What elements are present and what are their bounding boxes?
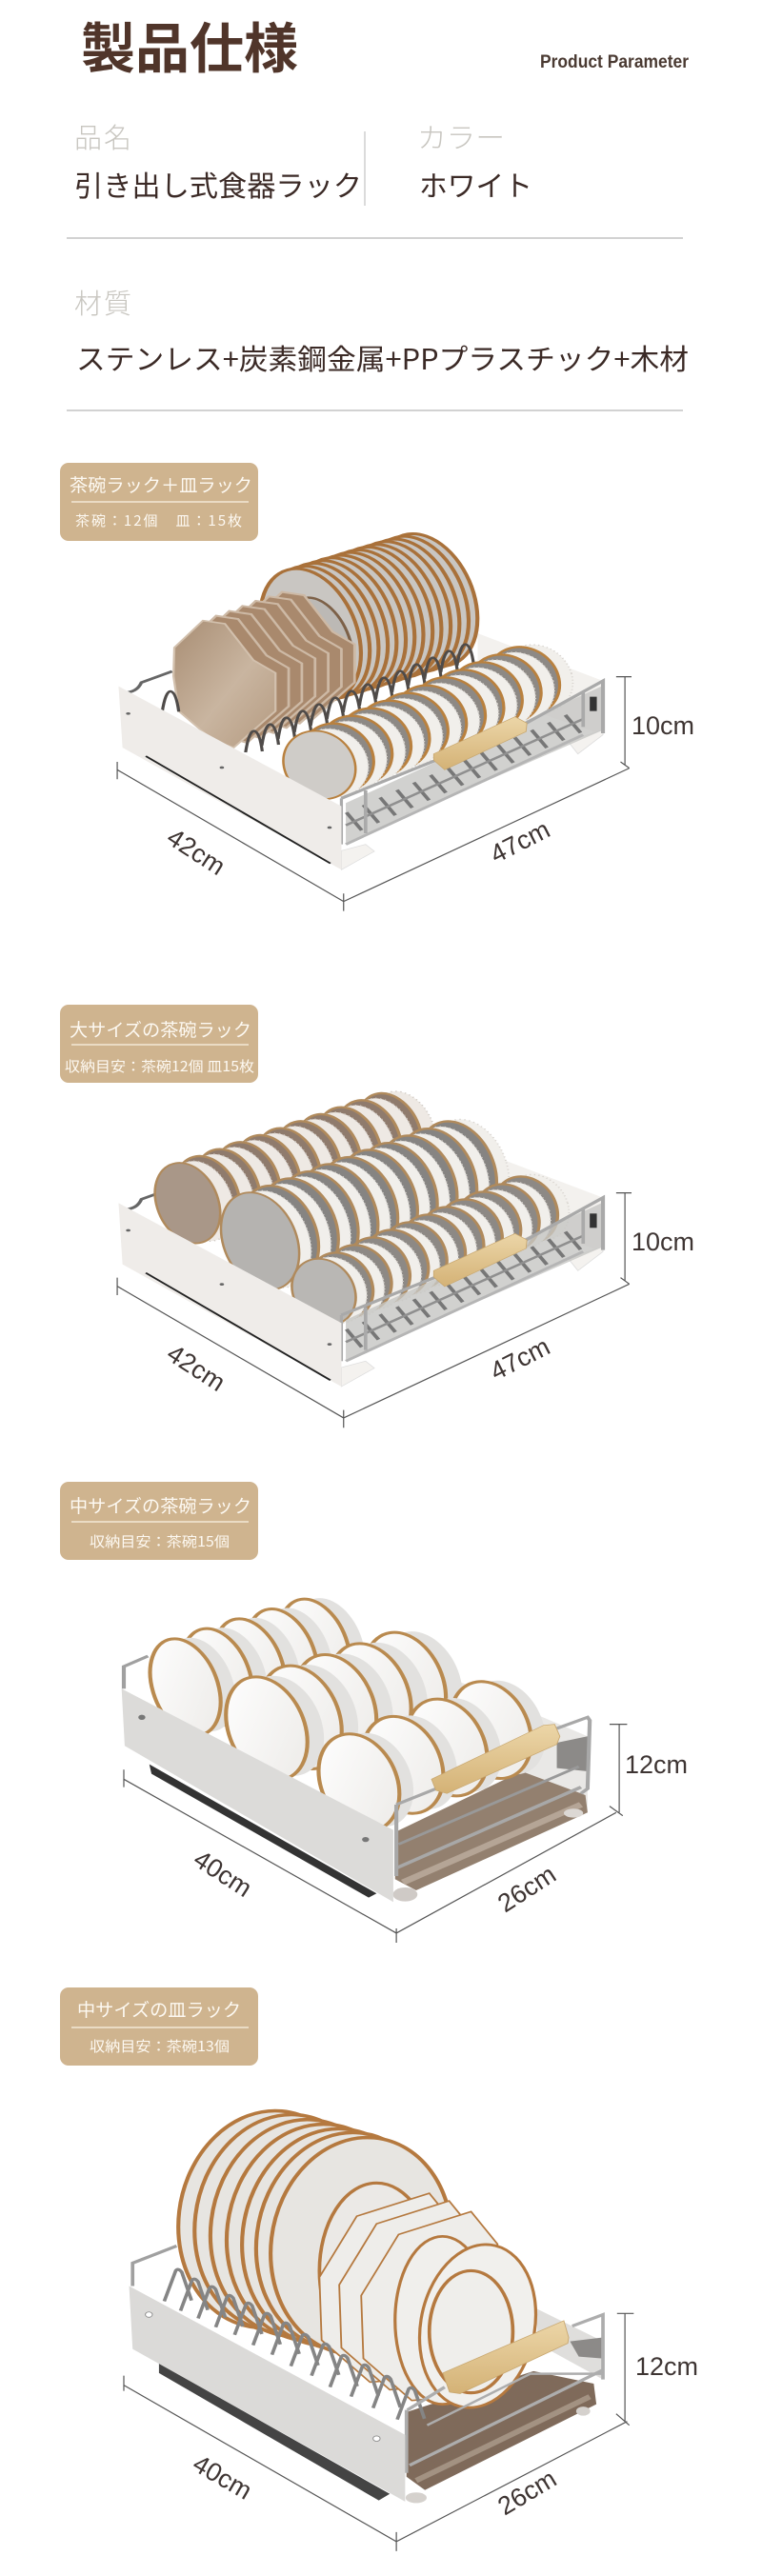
dimension lines: illustration 4 <box>124 2313 633 2551</box>
badge: large bowl rack <box>60 1005 258 1083</box>
rear bowls row <box>139 1593 376 1740</box>
product name label: 品名 <box>74 116 131 156</box>
badge: medium bowl rack: 収納目安：茶碗15個 <box>90 1531 230 1551</box>
title: 製品仕様 <box>81 6 298 84</box>
rack back, handle and tray <box>124 1656 588 1902</box>
badge: bowl and plate rack <box>60 463 258 541</box>
badge: medium bowl rack <box>60 1482 258 1560</box>
dimension: 12cm: 12cm <box>625 1750 688 1779</box>
bowls row <box>275 640 581 804</box>
badge: medium plate rack: 収納目安：茶碗13個 <box>90 2036 230 2056</box>
wire dish rack <box>162 645 473 752</box>
small front plates <box>395 2236 548 2414</box>
dimension: 40cm: 40cm <box>188 2449 257 2506</box>
wire plate holders <box>164 2269 425 2420</box>
octagonal plates <box>173 592 354 748</box>
color label: カラー <box>417 116 505 156</box>
dimension: 26cm: 26cm <box>492 2464 561 2521</box>
front wire frame <box>396 1717 590 1876</box>
badge: medium plate rack <box>60 1987 258 2066</box>
octagonal plates <box>319 2193 500 2401</box>
dimension: 40cm: 40cm <box>189 1845 257 1903</box>
middle bowls row <box>213 1626 474 1786</box>
dimension lines: illustration 2 <box>117 1193 632 1428</box>
dimension: 42cm: 42cm <box>162 823 231 881</box>
dimension: 12cm: 12cm <box>635 2352 698 2381</box>
color value: ホワイト <box>419 163 532 205</box>
rear bowls row <box>146 1087 446 1248</box>
wooden handle <box>443 2321 569 2393</box>
vertical separator <box>364 131 366 206</box>
badge: large bowl rack: 収納目安：茶碗12個 皿15枚 <box>65 1056 254 1076</box>
front bowls row <box>284 1170 577 1329</box>
middle bowls row <box>210 1114 520 1295</box>
dimension: 26cm: 26cm <box>492 1860 561 1918</box>
dimension lines: illustration 3 <box>124 1725 627 1943</box>
badge: bowl and plate rack: 茶碗：12個 皿：15枚 <box>75 510 242 530</box>
product name value: 引き出し式食器ラック <box>74 163 362 205</box>
side panel <box>122 1688 393 1902</box>
front wire frame <box>407 2315 603 2473</box>
illustration 3: medium bowl rack <box>122 1593 590 1902</box>
dimension: 47cm: 47cm <box>486 815 554 869</box>
dimension: 47cm: 47cm <box>486 1332 554 1386</box>
rear round plates <box>245 527 493 708</box>
round plates <box>166 2103 464 2363</box>
dimension: 10cm: 10cm <box>632 1228 694 1256</box>
illustration 1: bowl and plate rack <box>118 527 603 869</box>
wooden handle <box>431 1725 560 1793</box>
badge: bowl and plate rack: 茶碗ラック＋皿ラック <box>70 471 252 497</box>
front bowls row <box>307 1675 556 1836</box>
subtitle: Product Parameter: Product Parameter <box>540 52 690 72</box>
badge: large bowl rack: 大サイズの茶碗ラック <box>70 1016 251 1042</box>
material label: 材質 <box>74 282 131 322</box>
illustration 2: large bowl rack <box>118 1087 603 1387</box>
rack back, handle and tray <box>132 2246 603 2503</box>
side panel <box>130 2286 405 2502</box>
badge: medium bowl rack: 中サイズの茶碗ラック <box>70 1492 251 1518</box>
dimension: 42cm: 42cm <box>162 1339 231 1397</box>
badge: medium plate rack: 中サイズの皿ラック <box>77 1996 241 2022</box>
illustration 4: medium plate rack <box>130 2103 603 2503</box>
material value: ステンレス+炭素鋼金属+PPプラスチック+木材 <box>76 336 689 378</box>
dimension lines: illustration 1 <box>117 677 632 911</box>
dimension: 10cm: 10cm <box>632 711 694 740</box>
